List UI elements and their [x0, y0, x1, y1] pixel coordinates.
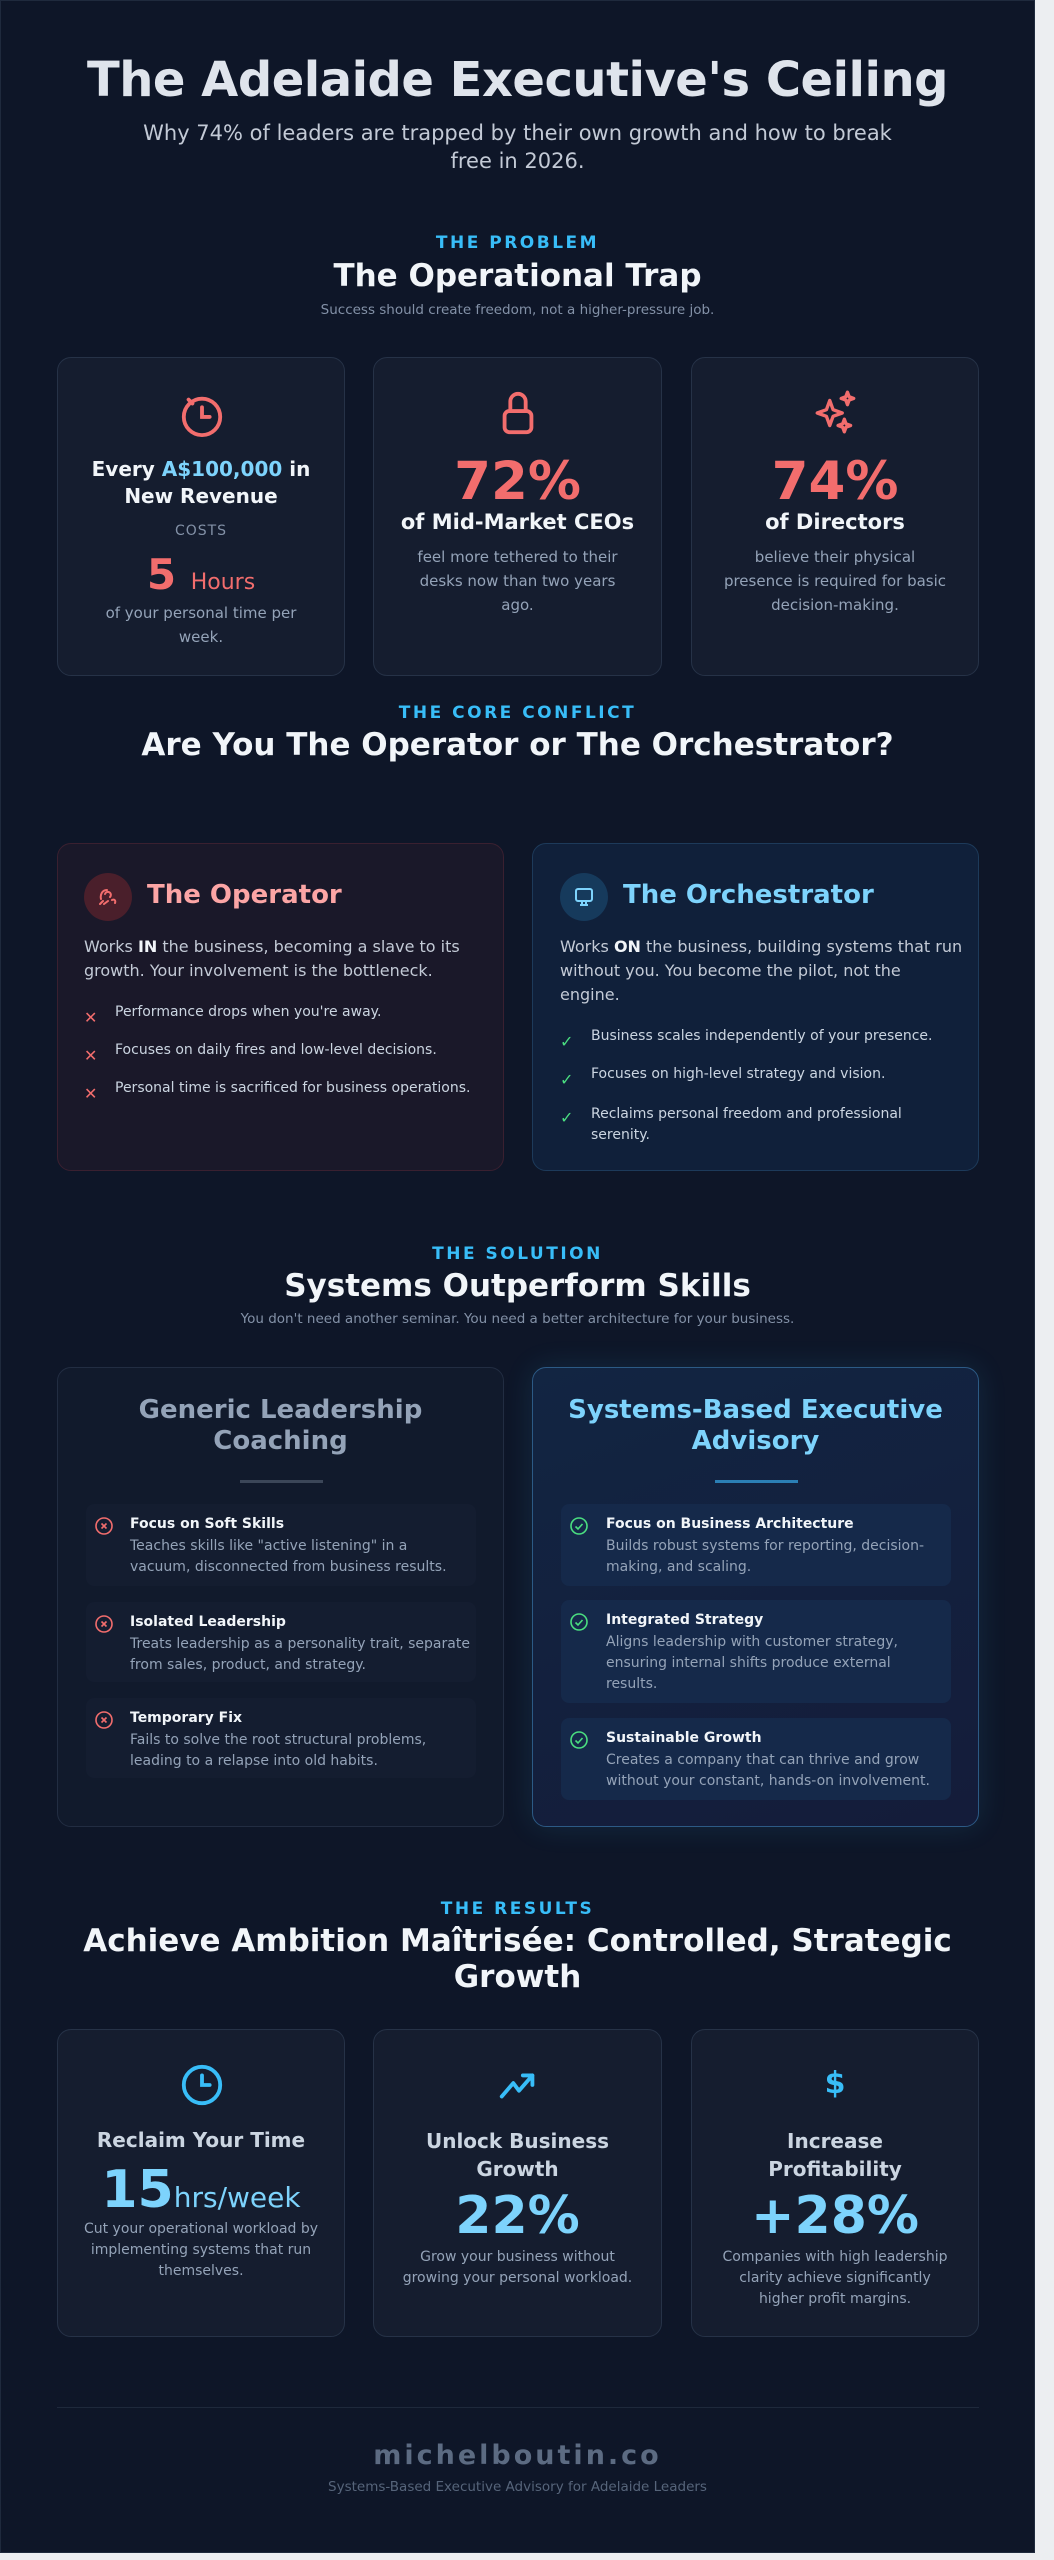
panel: profitability: [691, 2029, 979, 2337]
panel: generic coaching: [57, 1367, 504, 1827]
text: growth description: Grow your business without growing your personal workload.: [403, 2249, 632, 2286]
heading: systems-based executive advisory: Advisory: [692, 1426, 819, 1456]
item: temporary fix: Temporary Fix: [130, 1710, 242, 1726]
item: business architecture: Builds robust systems for reporting, decision-making, and scaling.: [606, 1538, 924, 1575]
subtitle: Why 74% of leaders are trapped by their own growth and how to break free in 2026.: [143, 121, 892, 173]
item: sustainable growth: [561, 1718, 951, 1800]
list: orchestrator positives: ✓: [560, 1070, 573, 1089]
item: isolated leadership: Isolated Leadership: [130, 1614, 286, 1630]
section label: results: THE RESULTS: [441, 1899, 594, 1919]
section label: solution: THE SOLUTION: [432, 1244, 603, 1264]
item: isolated leadership: Treats leadership as a personality trait, separate from sales, product, and strategy.: [130, 1636, 470, 1673]
heading: operator vs orchestrator: Are You The Operator or The Orchestrator?: [141, 727, 894, 763]
text: orchestrator description: engine.: [560, 985, 620, 1004]
text: mid-market ceos: of Mid-Market CEOs: [401, 510, 634, 534]
panel: CEO card: [373, 357, 662, 676]
list: operator negatives: ✕: [84, 1046, 97, 1065]
item: soft skills: [86, 1504, 476, 1586]
text: personal time: of your personal time per week.: [106, 604, 296, 646]
text: ceo description: feel more tethered to their desks now than two years ago.: [417, 548, 618, 614]
text: operator description: Works IN the business, becoming a slave to its growth. Your involvement is the bottleneck.: [84, 937, 460, 980]
heading: generic leadership coaching: Generic Leadership: [139, 1395, 422, 1425]
text: orchestrator description: [560, 937, 962, 1004]
text: revenue statement: [92, 457, 310, 508]
heading: generic leadership coaching: Coaching: [213, 1426, 348, 1456]
item: integrated strategy: Integrated Strategy: [606, 1612, 763, 1628]
panel: the operator: [57, 843, 504, 1171]
list: operator negatives: [84, 1004, 470, 1103]
icon: dollar: $: [825, 2066, 845, 2101]
item: isolated leadership: [86, 1602, 476, 1682]
heading: reclaim your time: Reclaim Your Time: [97, 2128, 305, 2152]
heading: unlock business growth: Unlock Business Growth: [426, 2129, 609, 2181]
heading: systems outperform skills: Systems Outperform Skills: [284, 1268, 751, 1304]
list: orchestrator positives: ✓: [560, 1108, 573, 1127]
item: soft skills: Focus on Soft Skills: [130, 1516, 284, 1532]
heading: systems-based executive advisory: Systems-Based Executive: [568, 1395, 943, 1425]
list: operator negatives: ✕: [84, 1008, 97, 1027]
list: orchestrator positives: [560, 1028, 932, 1143]
text: revenue statement: Every A$100,000 in: [92, 457, 310, 481]
list: orchestrator positives: Business scales independently of your presence.: [591, 1028, 932, 1044]
list: operator negatives: ✕: [84, 1084, 97, 1103]
heading: operational trap: The Operational Trap: [333, 258, 702, 294]
text: orchestrator description: Works ON the business, building systems that run: [560, 937, 962, 956]
title: The Adelaide Executive's Ceiling: [87, 52, 948, 108]
item: sustainable growth: Sustainable Growth: [606, 1730, 762, 1746]
section label: core conflict: THE CORE CONFLICT: [399, 703, 636, 723]
text: of directors: of Directors: [765, 510, 905, 534]
text: directors description: presence is required for basic: [724, 572, 946, 590]
icon: orchestrator circle: [560, 873, 608, 921]
list: orchestrator positives: Reclaims personal freedom and professional serenity.: [591, 1106, 902, 1143]
heading: the orchestrator: The Orchestrator: [623, 880, 874, 910]
item: integrated strategy: Aligns leadership with customer strategy, ensuring internal shifts produce external results.: [606, 1634, 898, 1692]
stat: +28%: +28%: [751, 2186, 919, 2246]
icon: lock: [502, 392, 534, 434]
solution subtitle: You don't need another seminar. You need a better architecture for your business.: [241, 1311, 794, 1327]
icon: clock: [182, 396, 222, 437]
text: orchestrator description: without you. You become the pilot, not the: [560, 961, 901, 980]
text: directors description: decision-making.: [771, 596, 899, 614]
heading: ambition maitrisee: Achieve Ambition Maîtrisée: Controlled, Strategic Growth: [83, 1923, 952, 1995]
panel: business growth: [373, 2029, 662, 2337]
stat: 15 hrs/week: 15hrs/week: [101, 2160, 301, 2220]
panel: systems-based advisory: [532, 1367, 979, 1827]
stat: 72%: 72%: [454, 451, 581, 512]
stat: 5 hours: 5 Hours: [147, 550, 255, 599]
panel: the orchestrator: [532, 843, 979, 1171]
heading: the operator: The Operator: [147, 880, 342, 910]
text: profitability description: Companies with high leadership clarity achieve significantly higher profit margins.: [722, 2249, 947, 2307]
panel: revenue cost card: [57, 357, 345, 676]
item: temporary fix: [86, 1698, 476, 1778]
icon: trending up: [500, 2073, 534, 2098]
panel: directors card: [691, 357, 979, 676]
item: temporary fix: Fails to solve the root structural problems, leading to a relapse into old habits.: [130, 1732, 426, 1769]
footer: tagline: Systems-Based Executive Advisory for Adelaide Leaders: [328, 2479, 707, 2495]
text: revenue statement: New Revenue: [124, 484, 278, 508]
item: soft skills: Teaches skills like "active listening" in a vacuum, disconnected from business results.: [130, 1538, 447, 1575]
stat: 74%: 74%: [772, 451, 898, 512]
footer: brand: michelboutin.co: [373, 2440, 662, 2471]
stat: 22%: 22%: [455, 2186, 580, 2246]
item: sustainable growth: Creates a company that can thrive and grow without your constant, hands-on involvement.: [606, 1752, 930, 1789]
item: integrated strategy: [561, 1600, 951, 1703]
list: operator negatives: Performance drops when you're away.: [115, 1004, 381, 1020]
heading: increase profitability: Increase Profitability: [768, 2129, 902, 2181]
list: operator negatives: Focuses on daily fires and low-level decisions.: [115, 1042, 437, 1058]
item: business architecture: Focus on Business Architecture: [606, 1516, 854, 1532]
section label: problem: THE PROBLEM: [436, 233, 599, 253]
problem subtitle: Success should create freedom, not a higher-pressure job.: [321, 302, 714, 318]
icon: clock: [182, 2064, 222, 2106]
list: operator negatives: Personal time is sacrificed for business operations.: [115, 1080, 470, 1096]
text: directors description: believe their physical: [755, 548, 915, 566]
heading: systems-based executive advisory: [568, 1395, 943, 1456]
list: orchestrator positives: Focuses on high-level strategy and vision.: [591, 1066, 885, 1082]
text: reclaim description: Cut your operational workload by implementing systems that run themselves.: [84, 2221, 318, 2279]
list: orchestrator positives: ✓: [560, 1032, 573, 1051]
icon: operator circle: [84, 873, 132, 921]
panel: reclaim time: [57, 2029, 345, 2337]
text: directors description: [724, 548, 946, 614]
heading: generic leadership coaching: [139, 1395, 422, 1456]
item: business architecture: [561, 1504, 951, 1586]
icon: sparkles: [816, 390, 856, 434]
text: costs: COSTS: [175, 523, 227, 539]
